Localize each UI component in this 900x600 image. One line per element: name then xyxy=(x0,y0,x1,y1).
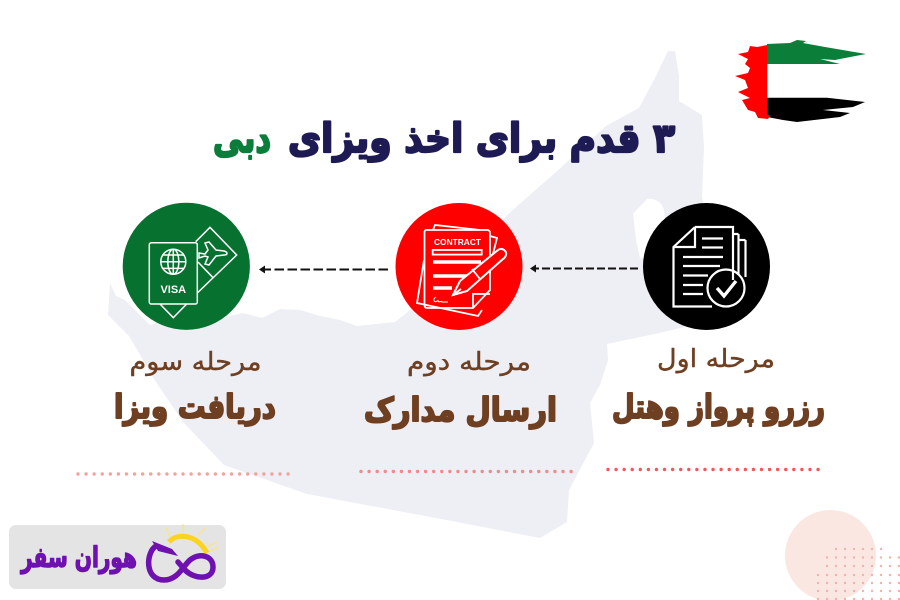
title: دبی xyxy=(213,116,271,162)
step 2 label: مرحله دوم xyxy=(407,347,531,377)
logo: Horan Safar xyxy=(9,524,226,589)
logo: Horan Safar: هوران سفر xyxy=(20,541,137,574)
dotted line: step 3 xyxy=(78,472,290,476)
step 2: red circle with contract icon: CONTRACT xyxy=(434,237,482,247)
step 3 label: دریافت ویزا xyxy=(114,387,276,427)
step 2 label xyxy=(364,347,557,429)
step 1 label xyxy=(612,344,825,427)
step 1 label: مرحله اول xyxy=(657,344,775,374)
arrow: step 2 to step 3 xyxy=(259,266,388,274)
step 2: red circle with contract icon xyxy=(396,203,522,330)
dotted line: step 2 xyxy=(361,470,573,473)
step 3: green circle with passport icon: VISA xyxy=(160,284,186,296)
icon: UAE flag xyxy=(735,40,866,122)
arrow: step 1 to step 2 xyxy=(530,264,638,272)
title: ۳ قدم برای اخذ ویزای xyxy=(288,116,675,162)
step 3: green circle with passport icon xyxy=(123,203,250,330)
step 1 label: رزرو پرواز وهتل xyxy=(612,387,825,427)
step 3 label: مرحله سوم xyxy=(130,347,262,376)
step 1: black circle with document icon xyxy=(643,203,770,330)
decorative peach circle with dots xyxy=(785,510,900,600)
step 3 label xyxy=(114,347,276,427)
step 2 label: ارسال مدارک xyxy=(364,390,557,429)
map of the UAE xyxy=(108,51,716,538)
dotted line: step 1 xyxy=(608,468,820,471)
